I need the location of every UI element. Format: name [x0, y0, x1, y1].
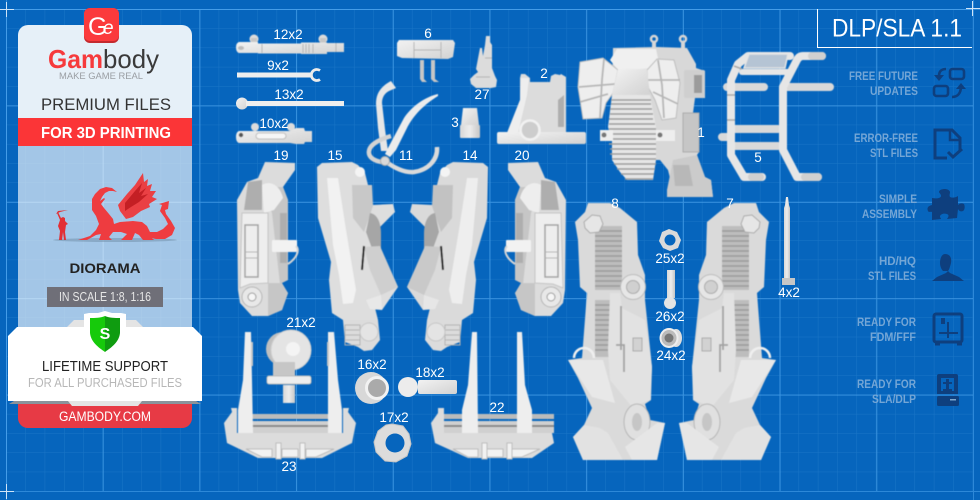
- brand wordmark: Gam: [48, 44, 103, 74]
- part 7: 7: [726, 196, 734, 211]
- icon: bust: [932, 254, 964, 281]
- part 22: 22: [489, 400, 505, 415]
- part 9x2: [237, 58, 320, 80]
- part 19: [237, 148, 298, 316]
- part 2: 2: [540, 66, 548, 81]
- scale badge: IN SCALE 1:8, 1:16: [59, 290, 151, 304]
- version tag: DLP/SLA 1.1: [818, 9, 972, 48]
- part 26x2: [655, 270, 685, 324]
- card: lifetime support: [8, 311, 202, 406]
- feature: simple assembly: SIMPLE: [879, 194, 917, 206]
- sidebar upper light panel: [18, 25, 192, 118]
- banner: for 3D printing: [18, 118, 192, 146]
- part 22: [431, 332, 554, 459]
- feature: free future updates: FREE FUTURE: [849, 71, 918, 83]
- footer: gambody.com: GAMBODY.COM: [59, 409, 151, 424]
- part 4x2: [778, 197, 800, 300]
- icon: sla printer: [937, 374, 959, 406]
- feature: simple assembly: ASSEMBLY: [862, 209, 917, 221]
- part 5: [722, 54, 830, 177]
- scale badge: [47, 287, 163, 307]
- part 1: [578, 36, 713, 197]
- feature: error-free stl files: [854, 130, 962, 160]
- category: diorama: DIORAMA: [70, 260, 140, 276]
- icon: document check: [935, 130, 962, 158]
- part 18x2: 18x2: [415, 365, 445, 380]
- part 2: [497, 66, 586, 144]
- feature: error-free stl files: ERROR-FREE: [854, 133, 918, 145]
- part 21x2: [266, 315, 316, 403]
- feature: ready for fdm/fff: READY FOR: [857, 317, 917, 329]
- feature: ready for sla/dlp: READY FOR: [857, 379, 917, 391]
- part 27: [470, 36, 497, 102]
- part 13x2: 13x2: [274, 87, 304, 102]
- icon: update arrows: [934, 69, 966, 97]
- part 10x2: 10x2: [259, 116, 289, 131]
- icon: dragon with human figure: [53, 173, 177, 242]
- part 3: [451, 108, 480, 138]
- feature: free future updates: [849, 69, 966, 98]
- feature: error-free stl files: STL FILES: [870, 148, 918, 160]
- feature: simple assembly: [862, 189, 965, 221]
- icon: green shield: S: [100, 326, 111, 343]
- part 23: [224, 332, 356, 474]
- part 12x2: [236, 27, 344, 54]
- part 7: [679, 196, 776, 460]
- version tag: DLP/SLA 1.1: DLP/SLA 1.1: [832, 14, 962, 42]
- logo badge: [84, 8, 119, 43]
- feature: ready for fdm/fff: [857, 314, 962, 344]
- part 5: 5: [754, 150, 762, 165]
- part 4x2: 4x2: [778, 285, 800, 300]
- feature: free future updates: UPDATES: [870, 86, 918, 98]
- feature: hd/hq stl files: HD/HQ: [879, 256, 916, 268]
- feature: ready for fdm/fff: FDM/FFF: [870, 332, 916, 344]
- part 11: 11: [399, 148, 413, 163]
- part 16x2: 16x2: [357, 357, 387, 372]
- logo badge: e: [103, 18, 114, 39]
- features list: [849, 69, 966, 406]
- part 20: 20: [514, 148, 530, 163]
- brand wordmark: [48, 44, 159, 82]
- part 14: 14: [462, 148, 478, 163]
- part 8: 8: [611, 196, 619, 211]
- part 15: 15: [327, 148, 343, 163]
- part 21x2: 21x2: [286, 315, 316, 330]
- support title: LIFETIME SUPPORT: [42, 358, 168, 375]
- part 3: 3: [451, 115, 459, 130]
- part 10x2: [236, 116, 312, 144]
- part 6: 6: [424, 26, 432, 41]
- icon: puzzle piece: [927, 189, 965, 220]
- part 18x2: [398, 365, 457, 397]
- part 23: 23: [281, 459, 297, 474]
- part 12x2: 12x2: [273, 27, 303, 42]
- part 13x2: [236, 87, 344, 110]
- icon: green shield: [84, 311, 126, 355]
- feature: hd/hq stl files: [868, 254, 964, 283]
- part 6: [397, 26, 455, 82]
- part 8: [568, 196, 665, 460]
- panel: left sidebar: [8, 8, 202, 428]
- part 27: 27: [474, 87, 490, 102]
- part 15: [317, 148, 398, 351]
- logo badge: G: [88, 13, 107, 41]
- part 24x2: 24x2: [656, 348, 686, 363]
- part 26x2: 26x2: [655, 309, 685, 324]
- heading: premium files: PREMIUM FILES: [41, 95, 171, 114]
- part 17x2: 17x2: [379, 410, 409, 425]
- part 9x2: 9x2: [267, 58, 289, 73]
- footer: gambody.com: [18, 395, 192, 428]
- part 17x2: [374, 410, 411, 462]
- brand wordmark: MAKE GAME REAL: [59, 71, 143, 82]
- part 20: [505, 148, 566, 316]
- part 1: 1: [697, 125, 705, 140]
- feature: ready for sla/dlp: SLA/DLP: [872, 394, 916, 406]
- banner: for 3D printing: FOR 3D PRINTING: [41, 125, 171, 142]
- brand wordmark: body: [103, 44, 159, 74]
- support subtitle: FOR ALL PURCHASED FILES: [28, 375, 182, 390]
- feature: hd/hq stl files: STL FILES: [868, 271, 916, 283]
- part 25x2: [655, 229, 685, 266]
- part 14: [407, 148, 488, 351]
- sidebar lower blue panel: [18, 146, 192, 336]
- part 11: [369, 81, 438, 172]
- part 24x2: [656, 329, 686, 363]
- part 16x2: [355, 357, 388, 404]
- icon: fdm printer: [934, 314, 962, 344]
- part 19: 19: [273, 148, 289, 163]
- feature: ready for sla/dlp: [857, 374, 959, 406]
- part 25x2: 25x2: [655, 251, 685, 266]
